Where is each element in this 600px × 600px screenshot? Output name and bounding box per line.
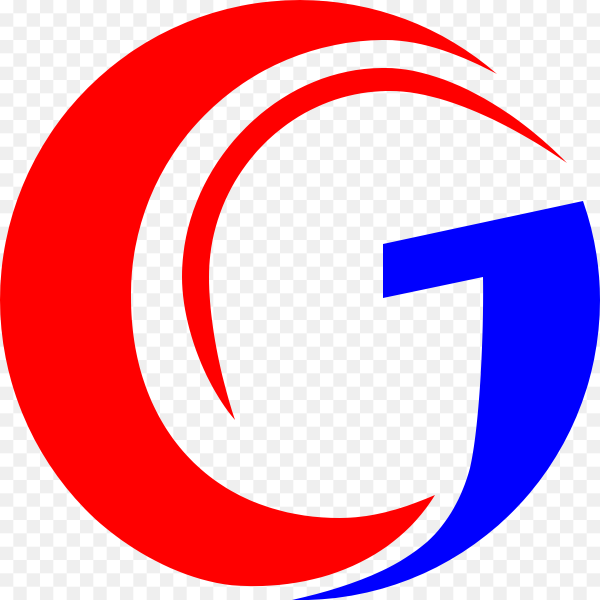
blue G crossbar and tail [292,201,600,600]
small red inner swoosh [182,68,567,420]
